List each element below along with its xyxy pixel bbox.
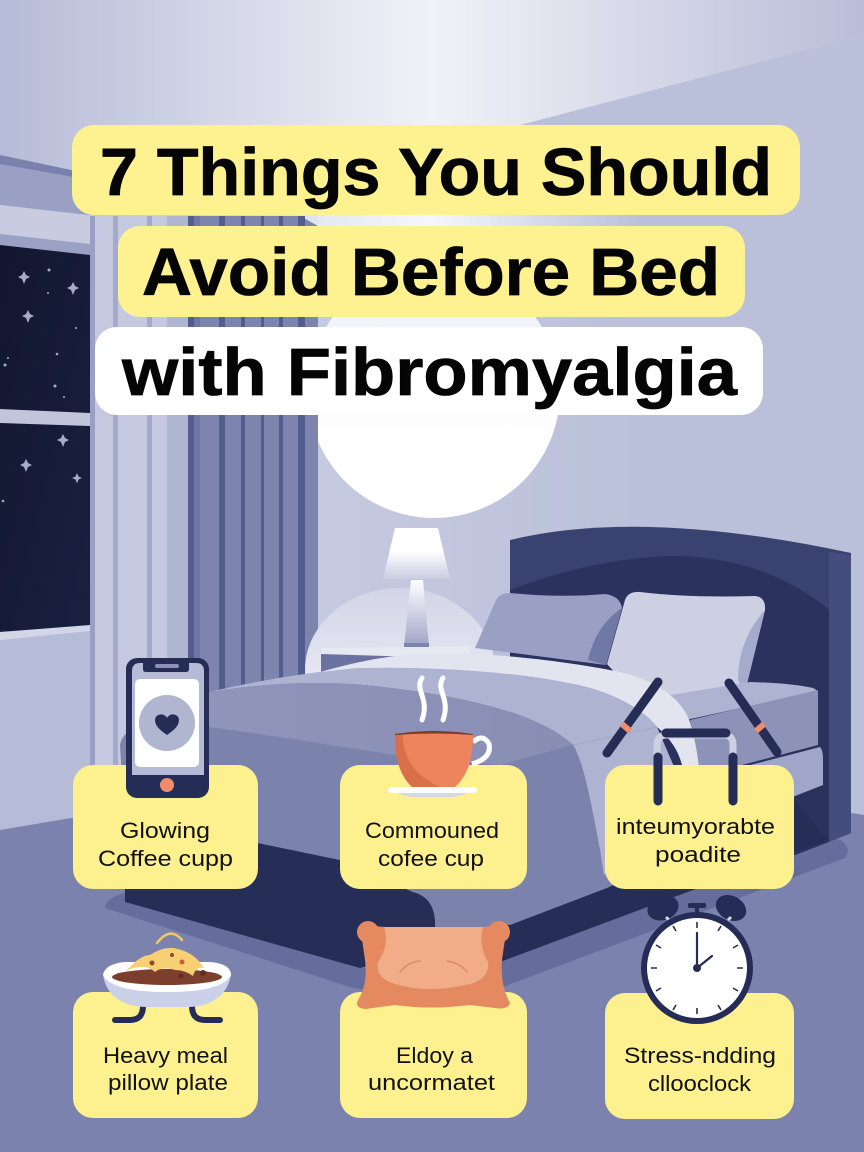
label bbox=[616, 814, 775, 867]
title line 1: 7 Things You Should bbox=[100, 135, 772, 210]
window with night sky bbox=[0, 245, 90, 640]
curtains bbox=[90, 216, 318, 776]
blanket mid tone bbox=[209, 683, 573, 765]
icon: phone bbox=[126, 658, 209, 798]
mattress top right bbox=[640, 682, 816, 730]
card 6: stress-inducing clock bbox=[605, 890, 794, 1119]
white sheet fold bbox=[320, 653, 699, 770]
label: cofee cup bbox=[378, 846, 484, 871]
bed base right bbox=[500, 800, 828, 962]
card 5: uncomfortable pillow bbox=[340, 921, 527, 1118]
blanket top surface bbox=[209, 668, 657, 745]
stars bbox=[2, 268, 82, 502]
right pillow bbox=[607, 592, 765, 700]
mattress side lower bbox=[700, 747, 823, 832]
label bbox=[624, 1043, 776, 1096]
bed shadow on floor bbox=[105, 835, 848, 1000]
icon: orange pillow bbox=[357, 921, 510, 1009]
blanket front drape bbox=[120, 692, 607, 925]
label: inteumyorabte bbox=[616, 814, 775, 839]
card 1: glowing phone bbox=[73, 658, 258, 889]
icon: alarm clock bbox=[644, 890, 751, 1021]
floor bbox=[0, 808, 864, 1152]
label: Heavy meal bbox=[103, 1043, 228, 1068]
bed base left bbox=[125, 830, 435, 968]
icon: bars and frame bbox=[607, 682, 777, 801]
label bbox=[103, 1043, 228, 1095]
label: Stress-ndding bbox=[624, 1043, 776, 1068]
label: uncormatet bbox=[368, 1070, 495, 1095]
label: Coffee cupp bbox=[98, 846, 233, 871]
label: poadite bbox=[655, 842, 741, 867]
blanket right panel bbox=[573, 727, 684, 875]
icon: bowl bbox=[103, 934, 231, 1020]
left pillow bbox=[475, 593, 622, 665]
title line 3: with Fibromyalgia bbox=[121, 335, 738, 410]
card 2: coffee cup bbox=[340, 678, 527, 889]
label bbox=[368, 1043, 495, 1095]
card 3: uncomfortable position bbox=[605, 682, 794, 889]
bedside lamp and table bbox=[305, 528, 495, 752]
label: Glowing bbox=[120, 818, 210, 843]
mattress side upper bbox=[690, 690, 818, 776]
icon: coffee cup bbox=[388, 678, 489, 797]
label: Commouned bbox=[365, 818, 499, 843]
moon glow bbox=[308, 266, 560, 518]
label: Eldoy a bbox=[396, 1043, 474, 1068]
pillows bbox=[475, 592, 765, 700]
bed mattress and blanket bbox=[120, 653, 828, 968]
title group bbox=[72, 125, 800, 415]
label: pillow plate bbox=[108, 1070, 228, 1095]
title line 2: Avoid Before Bed bbox=[142, 235, 720, 310]
label: cllooclock bbox=[648, 1071, 752, 1096]
card 4: heavy meal bbox=[73, 934, 258, 1118]
label bbox=[365, 818, 499, 871]
bed headboard bbox=[510, 527, 851, 855]
label bbox=[98, 818, 233, 871]
